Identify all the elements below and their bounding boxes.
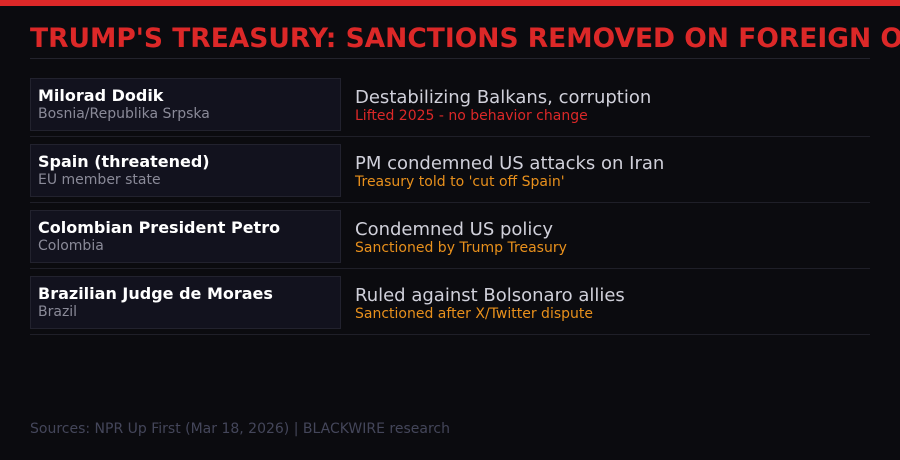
top accent bar (0, 0, 900, 6)
name box: de Moraes: Brazilian Judge de Moraes (38, 284, 273, 303)
name box: Spain (30, 144, 341, 197)
sources footer: Sources: NPR Up First (Mar 18, 2026) | BLACKWIRE research (30, 421, 450, 437)
name box: Spain: EU member state (38, 172, 161, 188)
name box: Petro (30, 210, 341, 263)
name box: de Moraes (30, 276, 341, 329)
name box: de Moraes: Brazil (38, 304, 77, 320)
status: Petro: Sanctioned by Trump Treasury (355, 240, 567, 256)
name box: Dodik: Bosnia/Republika Srpska (38, 106, 210, 122)
name box: Spain: Spain (threatened) (38, 152, 210, 171)
row: Spain (30, 144, 870, 203)
row: de Moraes (30, 276, 870, 335)
description: Dodik: Destabilizing Balkans, corruption (355, 87, 651, 108)
name box: Petro: Colombia (38, 238, 104, 254)
row: Dodik (30, 78, 870, 137)
description: Spain: PM condemned US attacks on Iran (355, 153, 664, 174)
description: Petro: Condemned US policy (355, 219, 553, 240)
status: Spain: Treasury told to 'cut off Spain' (355, 174, 565, 190)
name box: Petro: Colombian President Petro (38, 218, 280, 237)
status: de Moraes: Sanctioned after X/Twitter dispute (355, 306, 593, 322)
description: de Moraes: Ruled against Bolsonaro allies (355, 285, 625, 306)
name box: Dodik (30, 78, 341, 131)
status: Dodik: Lifted 2025 - no behavior change (355, 108, 588, 124)
name box: Dodik: Milorad Dodik (38, 86, 163, 105)
row: Petro (30, 210, 870, 269)
